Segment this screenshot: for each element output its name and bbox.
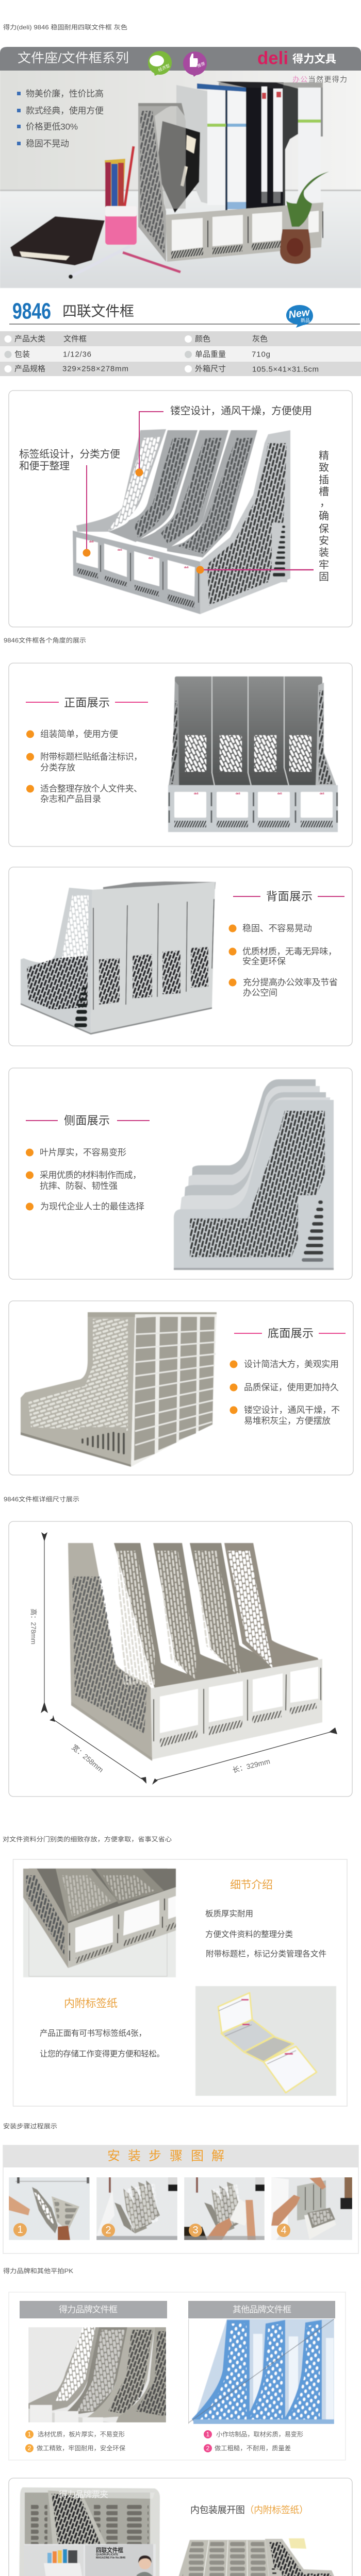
caption: dimensions: 9846文件框详细尺寸展示 (4, 1495, 79, 1503)
heading: installation diagram: 解 (211, 2149, 224, 2163)
bottom view bullet list: 易堆积灰尘，方便摆放 (244, 1416, 331, 1426)
caption: angle views: 9846文件框各个角度的展示 (4, 636, 86, 644)
other brand drawbacks: 小作坊制品，取材劣质，易变形 (216, 2430, 303, 2438)
heading: back view: 背面展示 (266, 890, 313, 903)
photo: retail package (19, 2487, 160, 2576)
callout: precise slots, vertical text (196, 450, 330, 583)
photo: step 2 (96, 2177, 177, 2240)
heading: installation diagram: 装 (128, 2149, 141, 2163)
callout: label design (19, 448, 120, 556)
spec table: 单品重量 (195, 350, 226, 359)
front view bullet list: 附带标题栏贴纸备注标识， (40, 752, 142, 761)
caption: brand comparison: 得力品牌和其他平拍PK (3, 2267, 73, 2275)
label logos on the front plate: deli (184, 566, 189, 569)
icon: economy badge: 经济型 (157, 63, 171, 73)
spec table: 1/12/36 (63, 350, 91, 359)
included labels description: 产品正面有可书写标签纸4张， (40, 2029, 146, 2038)
deli advantages: 做工精致，牢固耐用，安全环保 (37, 2444, 125, 2452)
icon: recommended badge: 推荐 (196, 61, 206, 69)
selling points: 款式经典，使用方便 (26, 105, 104, 115)
header: other brands: 其他品牌文件框 (233, 2305, 291, 2314)
included labels description: 让您的存储工作变得更方便和轻松。 (40, 2049, 165, 2059)
front view bullet list: 适合整理存放个人文件夹、 (40, 784, 142, 793)
header band (0, 47, 361, 71)
panel: bottom view (9, 1301, 353, 1475)
side view bullet list (26, 1148, 144, 1212)
heading: side view: 侧面展示 (64, 1114, 110, 1127)
front view bullet list: 杂志和产品目录 (40, 794, 101, 804)
selling points: 价格更低30% (26, 122, 78, 132)
step 3 number (189, 2224, 202, 2237)
photo: step 1 (9, 2177, 90, 2240)
step 3 number: 3 (192, 2225, 199, 2236)
product photo: side (174, 1079, 334, 1270)
arrow: height (30, 1532, 48, 1713)
heading: front view: 正面展示 (64, 697, 110, 709)
panel: packaging (9, 2478, 352, 2576)
included labels description (40, 2029, 165, 2059)
panel: installation steps (3, 2145, 358, 2253)
spec table: 包装 (14, 350, 30, 359)
panel: brand comparison (9, 2292, 346, 2460)
heading: bottom view: 底面展示 (268, 1327, 314, 1340)
heading: included labels: 内附标签纸 (64, 1998, 118, 2009)
spec table: 颜色 (195, 335, 210, 343)
other brand drawbacks: 做工粗糙，不耐用，质量差 (215, 2444, 291, 2452)
heading: installation diagram: 骤 (170, 2149, 183, 2163)
spec table: 329×258×278mm (62, 365, 128, 373)
label logos on the front plate: deli (118, 549, 122, 552)
panel: product callouts (9, 391, 352, 627)
callout: hollow design: 镂空设计，通风干燥，方便使用 (170, 405, 312, 417)
heading: installation diagram: 安 (107, 2149, 120, 2163)
package label text: 四联文件框 (96, 2546, 123, 2554)
photo: label sheets (195, 1986, 336, 2096)
front view bullet list: 组装简单，使用方便 (40, 728, 118, 739)
callout: precise slots, vertical text: 装 (319, 547, 329, 558)
spec table: 710g (252, 350, 270, 359)
panel: dimensions (9, 1521, 352, 1797)
callout: precise slots, vertical text: ， (320, 497, 330, 509)
product photo: file frame three-quarter view (73, 429, 290, 614)
callout: label design: 标签纸设计，分类方便 (19, 448, 120, 460)
label logos on the front plate: deli (89, 540, 94, 544)
callout: hollow design (135, 405, 312, 476)
selling points: 稳固不晃动 (26, 139, 69, 148)
spec table: 产品大类 (14, 335, 45, 343)
package label text: MAGAZINE File No.9846 (96, 2556, 125, 2560)
deli advantages (25, 2430, 125, 2452)
hero photo: desk scene with file frame (0, 70, 361, 288)
panel: detail introduction (13, 1859, 347, 2106)
spec table: 105.5×41×31.5cm (252, 365, 319, 374)
step 2 number (102, 2224, 115, 2237)
callout: precise slots, vertical text: 牢 (319, 559, 329, 571)
bottom view bullet list (230, 1359, 340, 1426)
packaging heading: 内包装展开图（内附标签纸） (190, 2505, 308, 2515)
photo: step 3 (184, 2177, 265, 2240)
selling points (17, 89, 104, 148)
callout: precise slots, vertical text: 固 (319, 571, 329, 583)
panel: hero banner (0, 47, 361, 288)
deli advantages: 选材优质，板片厚实，不易变形 (38, 2430, 125, 2438)
photo: other brand file frame (188, 2319, 334, 2424)
spec table (0, 331, 361, 376)
icon: new badge: New (288, 307, 311, 321)
panel: front view (9, 663, 352, 846)
header: other brands (188, 2301, 335, 2318)
detail feature list (205, 1909, 326, 1959)
step 1 number (13, 2223, 27, 2236)
product photo: dimensions (68, 1543, 322, 1761)
back view bullet list: 稳固、不容易晃动 (242, 923, 312, 934)
heading: model number and name (9, 299, 360, 325)
photo: deli file frame (28, 2327, 166, 2422)
series title: 文件座/文件框系列 (18, 51, 129, 65)
heading: installation diagram (107, 2149, 224, 2163)
photo: step 4 (271, 2177, 352, 2240)
detail feature list: 板质厚实耐用 (205, 1909, 253, 1919)
back view bullet list: 安全更环保 (242, 956, 286, 967)
heading: model number and name: 四联文件框 (62, 303, 134, 319)
product photo: back (21, 882, 216, 1035)
product photo: bottom (21, 1312, 217, 1467)
deli advantages: 1 (28, 2431, 31, 2438)
header: deli brand (20, 2301, 167, 2318)
icon: new badge (286, 305, 313, 328)
side view bullet list: 为现代企业人士的最佳选择 (40, 1201, 144, 1212)
arrow: height: 高：278mm (30, 1608, 37, 1645)
spec table: 文件框 (63, 335, 87, 343)
callout: precise slots, vertical text: 精 (319, 450, 329, 462)
product photo: front (168, 676, 338, 832)
label logos on the front plate (89, 540, 189, 569)
arrow: length (152, 1727, 337, 1785)
detail feature list: 附带标题栏，标记分类管理各文件 (206, 1950, 326, 1959)
spec table: 灰色 (252, 335, 268, 343)
icon: new badge: 新品 (301, 317, 310, 323)
slogan: 办公当然更得力 (292, 75, 347, 83)
spec table: 产品规格 (14, 365, 45, 373)
heading: installation diagram: 图 (191, 2149, 204, 2163)
panel: side view (9, 1068, 352, 1279)
package label text: QUADRUPLICATE (96, 2553, 119, 2556)
front view bullet list: 分类存放 (40, 762, 75, 773)
heading: model number and name: 9846 (12, 299, 51, 324)
spec table: 外箱尺寸 (195, 365, 226, 373)
arrow: length: 长：329mm (232, 1757, 271, 1774)
step 4 number (277, 2224, 290, 2237)
other brand drawbacks: 1 (206, 2431, 210, 2438)
icon: economy badge (148, 51, 172, 76)
callout: precise slots, vertical text: 插 (319, 474, 329, 486)
overlay text on package: 得力品牌票夹 (59, 2489, 108, 2500)
selling points: 物美价廉，性价比高 (26, 89, 104, 99)
step 1 number: 1 (17, 2224, 23, 2235)
step 4 number: 4 (281, 2225, 287, 2236)
side view bullet list: 采用优质的材料制作而成， (40, 1171, 141, 1180)
callout: precise slots, vertical text: 槽 (319, 486, 329, 498)
back view bullet list (229, 923, 338, 997)
front label logos: deli (236, 792, 240, 795)
callout: precise slots, vertical text: 致 (319, 462, 329, 473)
deli advantages: 2 (28, 2445, 31, 2452)
heading: detail introduction: 细节介绍 (230, 1879, 273, 1891)
back view bullet list: 办公空间 (243, 988, 277, 997)
front view bullet list (26, 728, 142, 804)
bottom view bullet list: 镂空设计，通风干燥，不 (244, 1405, 340, 1415)
side view bullet list: 抗摔、防裂、韧性强 (40, 1181, 118, 1191)
arrow: width (50, 1715, 146, 1784)
bottom view bullet list: 品质保证，使用更加持久 (244, 1382, 339, 1392)
caption: install steps: 安装步骤过程展示 (3, 2122, 57, 2130)
other brand drawbacks: 2 (206, 2445, 210, 2452)
logo: 得力文具: 得力文具 (292, 53, 336, 65)
caption: product name: 得力(deli) 9846 稳固耐用四联文件框 灰色 (3, 23, 127, 31)
front label logos: deli (194, 792, 199, 795)
caption: storage: 对文件资料分门别类的细致存放，方便拿取，省事又省心 (3, 1835, 172, 1843)
callout: precise slots, vertical text: 保 (319, 523, 329, 535)
back view bullet list: 充分提高办公效率及节省 (243, 978, 338, 987)
heading: installation diagram: 步 (149, 2149, 161, 2163)
front label logos: deli (320, 792, 324, 795)
side view bullet list: 叶片厚实，不容易变形 (40, 1148, 126, 1157)
label logos on the front plate: deli (149, 557, 153, 560)
logo: deli: deli (257, 48, 288, 68)
arrow: width: 宽：258mm (70, 1743, 105, 1774)
callout: label design: 和便于整理 (19, 460, 70, 472)
photo: detail close-up (23, 1869, 176, 1977)
other brand drawbacks (204, 2430, 303, 2452)
package label text (28, 2546, 132, 2576)
callout: precise slots, vertical text: 确 (319, 510, 329, 522)
back view bullet list: 优质材质，无毒无异味， (242, 947, 337, 956)
photo: unfolded parts (174, 2538, 341, 2576)
header: deli brand: 得力品牌文件框 (59, 2305, 118, 2314)
front label logos (194, 792, 324, 795)
icon: recommended badge (183, 52, 207, 77)
detail feature list: 方便文件资料的整理分类 (205, 1930, 293, 1939)
front label logos: deli (277, 792, 282, 795)
callout: precise slots, vertical text: 安 (319, 535, 329, 547)
step 2 number: 2 (105, 2225, 111, 2236)
bottom view bullet list: 设计简洁大方，美观实用 (244, 1359, 339, 1369)
panel: back view (9, 867, 352, 1046)
